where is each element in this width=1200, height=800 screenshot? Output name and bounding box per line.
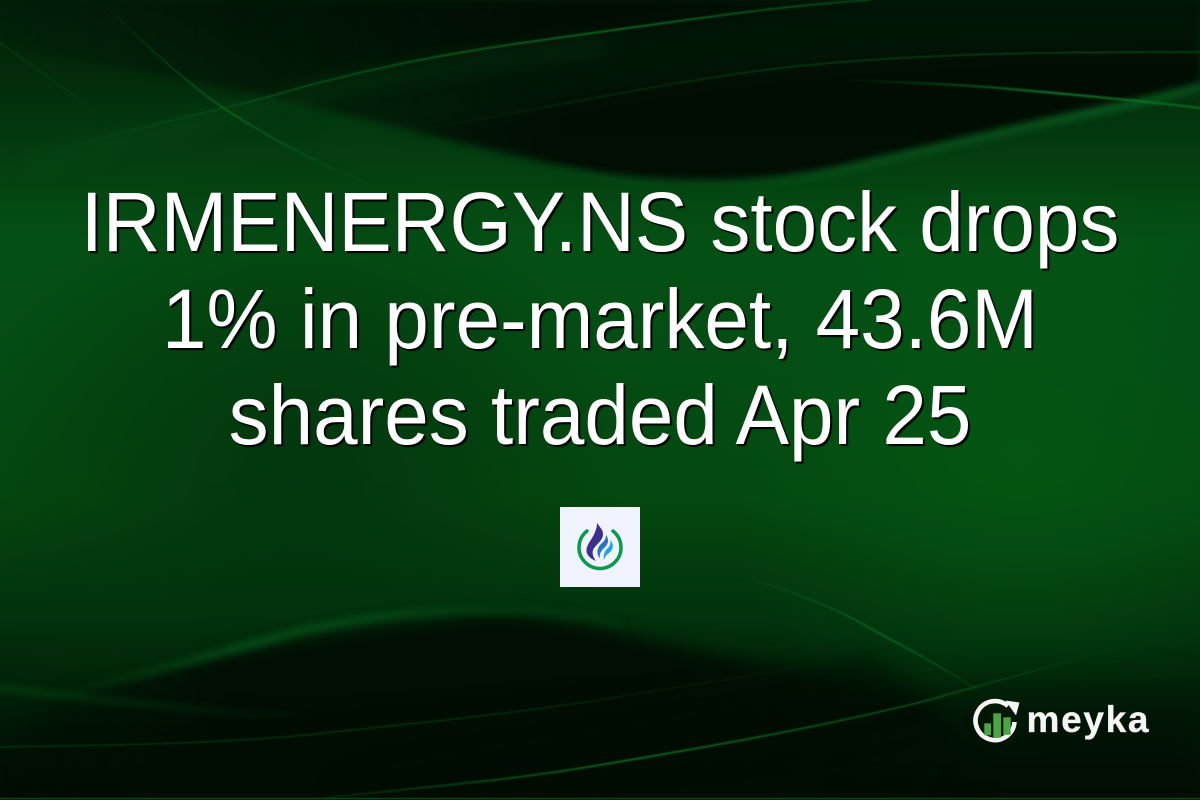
icon: meyka ring with bars [973, 698, 1020, 742]
icon: company flame logo [560, 507, 640, 587]
title: 1% in pre-market, 43.6M [162, 272, 1038, 365]
brand wordmark: meyka [1026, 699, 1150, 740]
title [81, 175, 1119, 464]
title: IRMENERGY.NS stock drops [81, 175, 1119, 269]
brand logo: meyka [973, 698, 1150, 742]
title: shares traded Apr 25 [229, 368, 971, 462]
